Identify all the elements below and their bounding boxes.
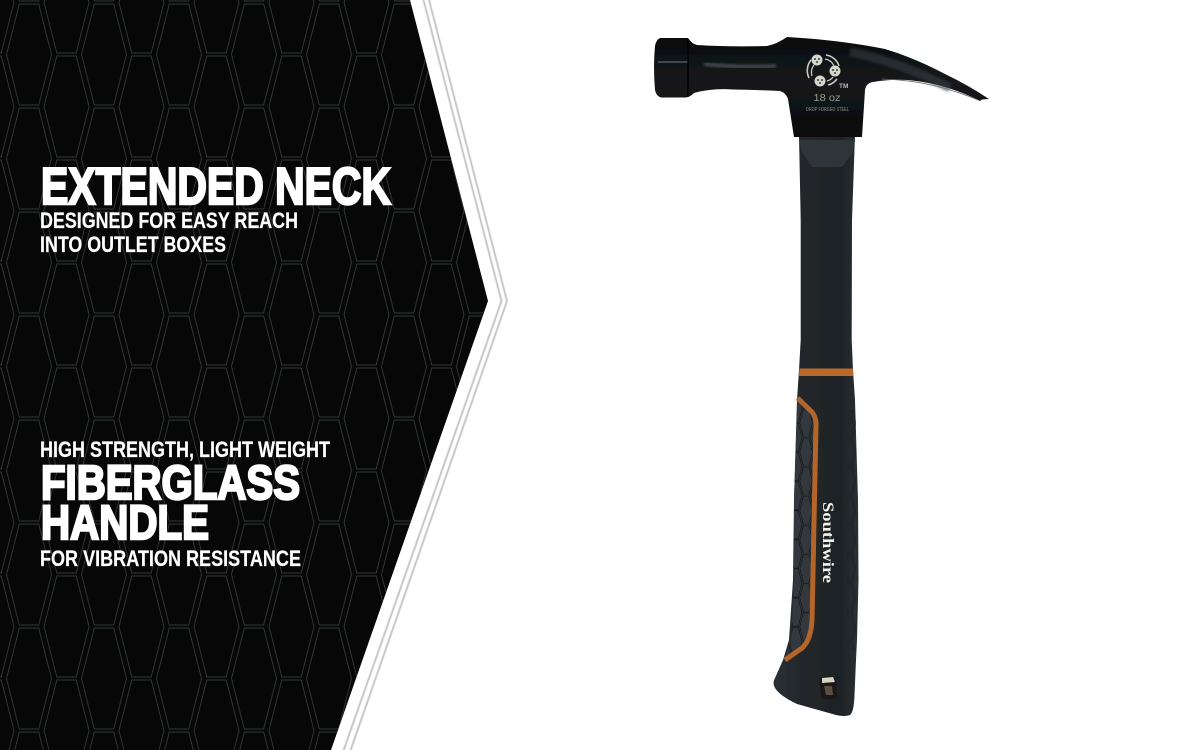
- cheek and claw sheen: [850, 52, 950, 88]
- heading block: extended neck: EXTENDED NECK: [41, 158, 391, 216]
- hammer head: [654, 37, 989, 137]
- heading block: extended neck: INTO OUTLET BOXES: [40, 232, 226, 257]
- orange grip stripe: [785, 398, 816, 660]
- right side grip texture: [846, 410, 856, 650]
- steel marking: DROP FORGED STEEL: [806, 107, 849, 113]
- hammer handle: [774, 135, 858, 716]
- brand name on grip: Southwire: [819, 502, 836, 583]
- poll and neck highlights: [658, 61, 688, 63]
- weight marking: 18 oz: [814, 93, 840, 104]
- logo: circular emblem: [807, 54, 840, 86]
- grip texture panel: [784, 402, 814, 662]
- heading block: fiberglass handle: [40, 437, 330, 571]
- hammer: [654, 37, 989, 716]
- chevron double outline: [343, 0, 507, 750]
- handle neck chamfer: [799, 140, 855, 167]
- heading block: fiberglass handle: HANDLE: [41, 497, 209, 550]
- orange collar band: [799, 368, 854, 376]
- trademark mark: TM: [839, 83, 848, 90]
- heading block: extended neck: DESIGNED FOR EASY REACH: [40, 208, 298, 233]
- handle hang hole: [820, 676, 837, 699]
- heading block: fiberglass handle: HIGH STRENGTH, LIGHT WEIGHT: [40, 437, 330, 462]
- heading block: fiberglass handle: FIBERGLASS: [41, 457, 300, 510]
- panel: black chevron with hexagon pattern: [0, 0, 488, 750]
- heading block: extended neck: [40, 158, 391, 257]
- heading block: fiberglass handle: FOR VIBRATION RESISTANCE: [40, 546, 301, 571]
